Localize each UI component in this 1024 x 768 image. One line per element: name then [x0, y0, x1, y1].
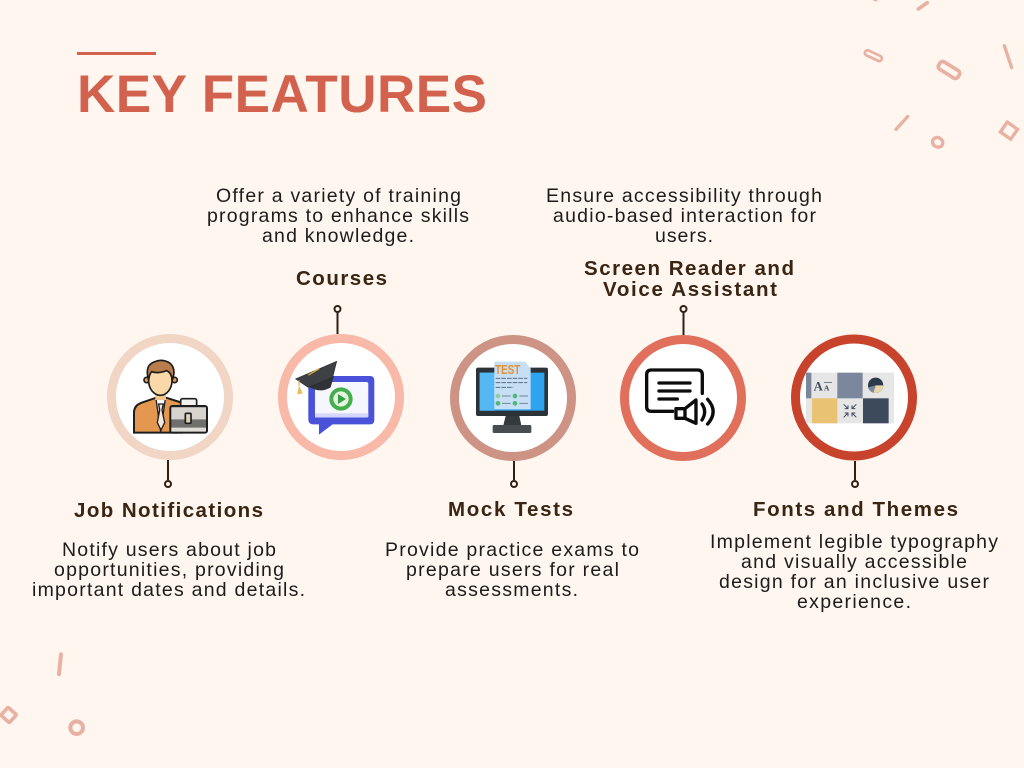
description: Screen Reader and Voice Assistant: audio-based interaction for	[553, 205, 816, 227]
description: Fonts and Themes	[710, 531, 998, 613]
description: Courses: programs to enhance skills	[207, 205, 469, 227]
heading: Screen Reader and Voice Assistant: Screen Reader and	[584, 257, 794, 280]
ring: Courses	[282, 338, 400, 456]
heading: Screen Reader and Voice Assistant	[584, 257, 794, 301]
description: Courses: Offer a variety of training	[216, 185, 461, 207]
icon: computer with test sheet	[476, 362, 548, 433]
description: Fonts and Themes: Implement legible typography	[710, 531, 998, 553]
description: Fonts and Themes: and visually accessible	[741, 551, 967, 573]
heading: Mock Tests: Mock Tests	[448, 498, 573, 521]
ring: Mock Tests	[454, 340, 572, 456]
ring: Job Notifications	[112, 338, 228, 456]
heading: Job Notifications: Job Notifications	[74, 499, 263, 522]
heading: Screen Reader and Voice Assistant: Voice Assistant	[603, 278, 777, 301]
description: Courses: and knowledge.	[262, 225, 414, 247]
connector: Mock Tests	[511, 461, 517, 487]
connector: Fonts and Themes	[852, 461, 858, 487]
feature: Fonts and Themes	[710, 339, 998, 613]
icon: businessman with briefcase	[134, 360, 207, 433]
ring: Fonts and Themes	[796, 339, 912, 456]
description: Job Notifications: important dates and details.	[32, 579, 305, 601]
description: Courses	[207, 185, 469, 247]
feature: Job Notifications	[32, 338, 305, 601]
description: Fonts and Themes: experience.	[797, 591, 911, 613]
description: Screen Reader and Voice Assistant	[546, 185, 822, 247]
feature: Courses	[207, 185, 469, 456]
title rule	[77, 52, 156, 55]
title: KEY FEATURES	[77, 65, 487, 124]
icon: design swatch grid: A	[814, 379, 824, 393]
description: Job Notifications: Notify users about job	[62, 539, 276, 561]
description: Job Notifications	[32, 539, 305, 601]
description: Mock Tests: prepare users for real	[406, 559, 619, 581]
description: Job Notifications: opportunities, providing	[54, 559, 284, 581]
connector: Screen Reader and Voice Assistant	[680, 306, 686, 335]
description: Mock Tests	[385, 539, 639, 601]
description: Fonts and Themes: design for an inclusive user	[719, 571, 990, 593]
feature: Screen Reader and Voice Assistant	[546, 185, 822, 456]
description: Mock Tests: assessments.	[445, 579, 578, 601]
decorative confetti: top right	[864, 0, 1018, 149]
description: Screen Reader and Voice Assistant: users.	[655, 225, 713, 247]
description: Screen Reader and Voice Assistant: Ensure accessibility through	[546, 185, 822, 207]
feature: Mock Tests	[385, 340, 639, 601]
heading: Fonts and Themes: Fonts and Themes	[753, 498, 958, 521]
ring: Screen Reader and Voice Assistant	[624, 340, 742, 456]
icon: design swatch grid: A	[824, 383, 830, 392]
connector: Job Notifications	[165, 460, 171, 487]
heading: Courses: Courses	[296, 267, 387, 290]
connector: Courses	[334, 306, 340, 334]
icon: computer with test sheet: TEST	[495, 363, 521, 377]
icon: design swatch grid	[806, 373, 894, 423]
decorative confetti: bottom left	[1, 654, 83, 734]
description: Mock Tests: Provide practice exams to	[385, 539, 639, 561]
icon: graduation cap and video bubble	[296, 361, 374, 435]
icon: text with speaker	[647, 370, 713, 424]
